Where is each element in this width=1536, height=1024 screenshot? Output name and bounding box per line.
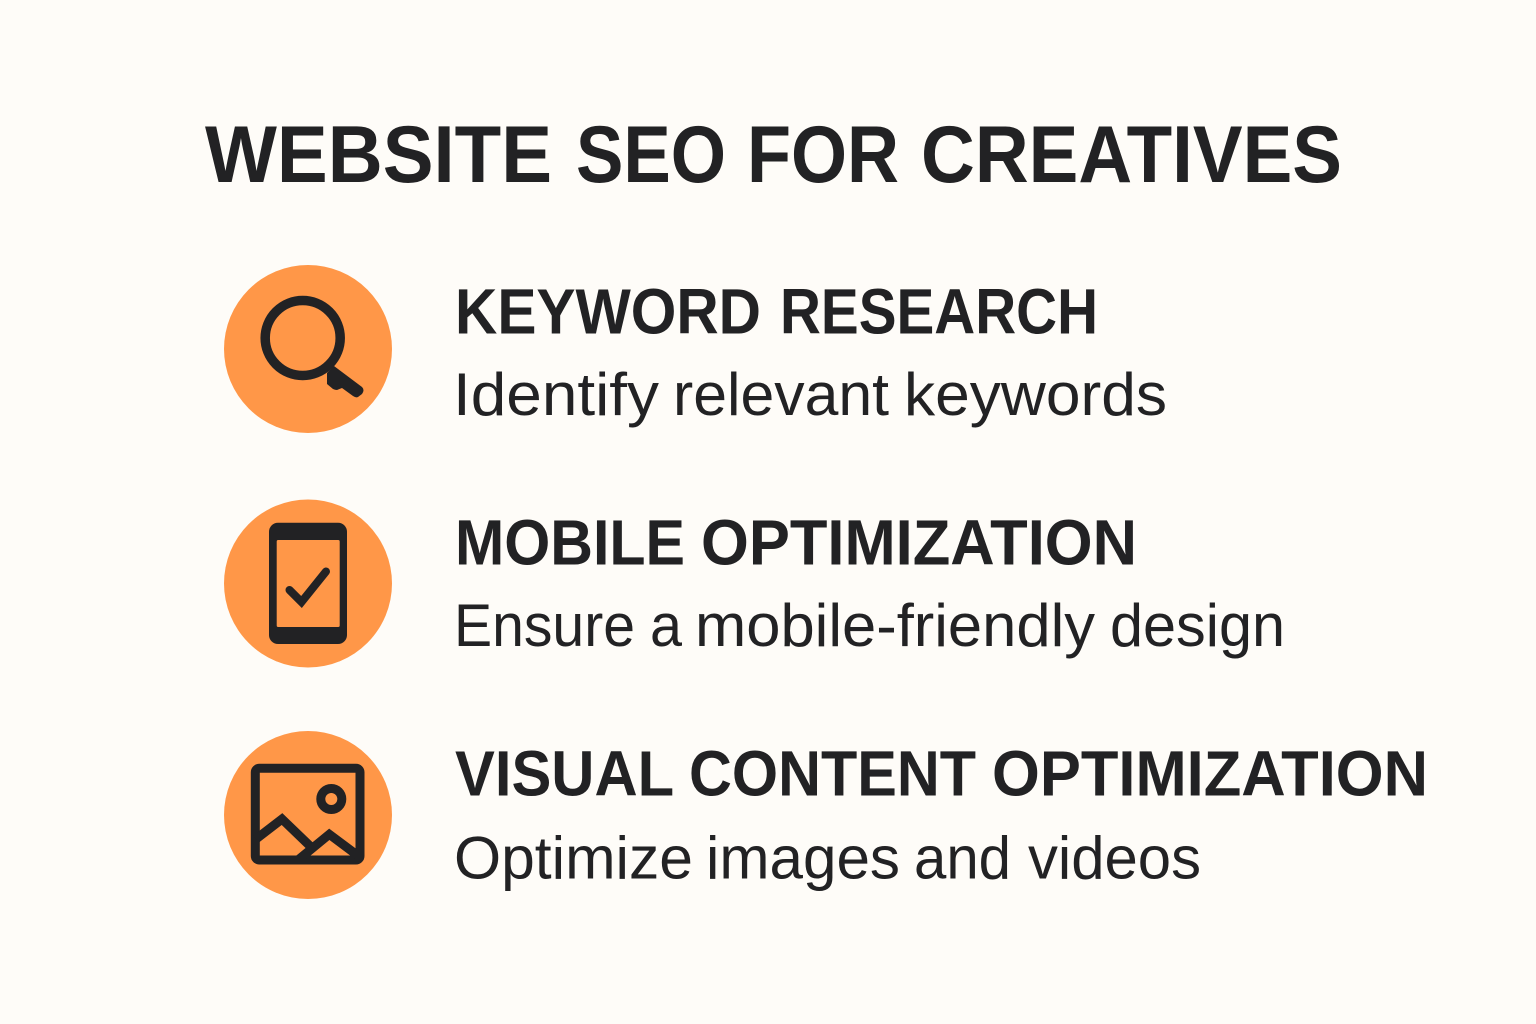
text: mobile optimization description: a bbox=[650, 592, 683, 659]
text: keyword research description: relevant bbox=[673, 361, 889, 428]
title: FOR bbox=[747, 110, 899, 200]
heading: visual content optimization: VISUAL bbox=[455, 738, 673, 810]
heading: keyword research: KEYWORD bbox=[455, 276, 761, 348]
title: WEBSITE bbox=[205, 110, 552, 200]
icon: magnifying glass bbox=[224, 265, 392, 433]
title: SEO bbox=[576, 110, 726, 200]
text: mobile optimization description: Ensure bbox=[454, 592, 635, 659]
text: visual content optimization description: images bbox=[706, 824, 900, 891]
heading: visual content optimization: CONTENT bbox=[689, 738, 976, 810]
panel: visual content optimization bbox=[224, 731, 1428, 899]
icon: phone with checkmark bbox=[224, 500, 392, 668]
text: keyword research description: Identify bbox=[453, 361, 659, 428]
title: CREATIVES bbox=[921, 110, 1342, 200]
text: keyword research description: keywords bbox=[904, 361, 1167, 428]
panel: mobile optimization bbox=[224, 500, 1285, 668]
heading: mobile optimization: OPTIMIZATION bbox=[701, 506, 1137, 578]
heading: visual content optimization: OPTIMIZATION bbox=[992, 738, 1428, 810]
text: visual content optimization description: videos bbox=[1028, 824, 1201, 891]
icon: image frame with mountains bbox=[224, 731, 392, 899]
text: visual content optimization description: and bbox=[914, 824, 1011, 891]
text: mobile optimization description: design bbox=[1110, 592, 1285, 659]
heading: mobile optimization: MOBILE bbox=[455, 506, 685, 578]
panel: keyword research bbox=[224, 265, 1167, 433]
heading: keyword research: RESEARCH bbox=[780, 276, 1098, 348]
text: visual content optimization description: Optimize bbox=[454, 824, 693, 891]
text: mobile optimization description: mobile-friendly bbox=[695, 592, 1095, 659]
